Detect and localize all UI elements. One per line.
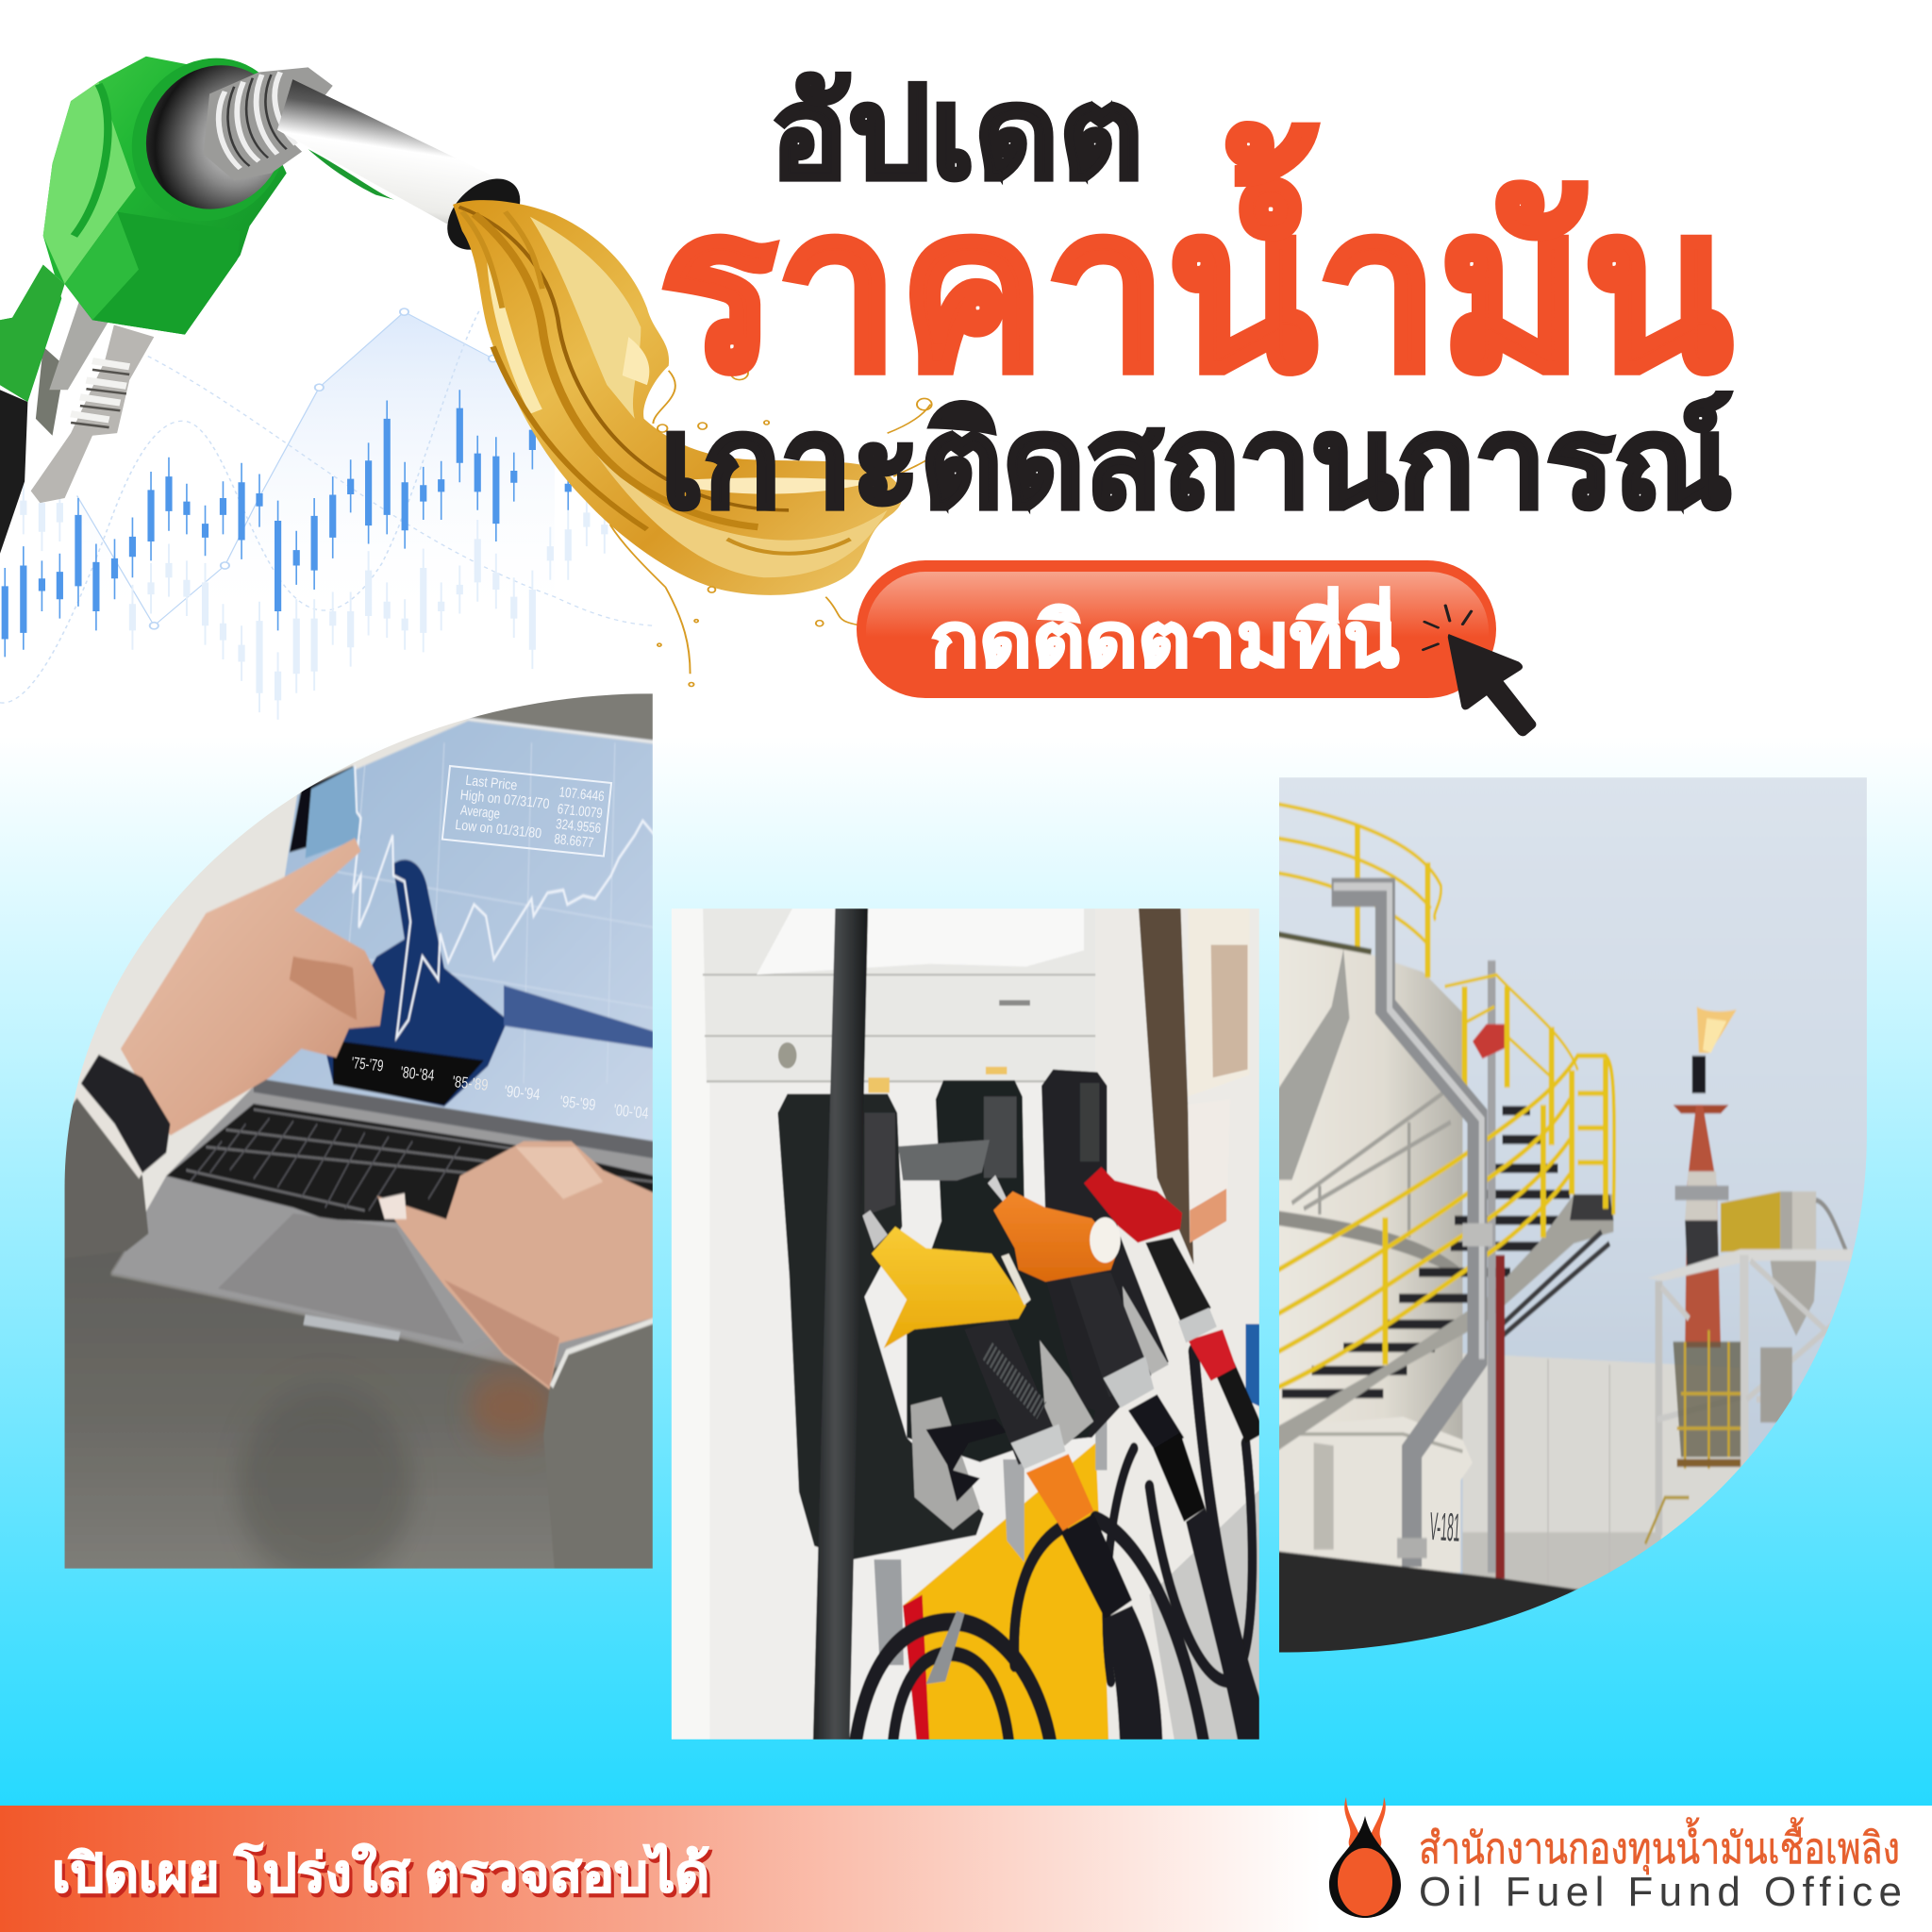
top desk strip — [470, 693, 653, 741]
trigger guard and lever — [31, 298, 154, 503]
on-screen price legend — [442, 766, 611, 857]
yellow panel — [903, 1443, 1109, 1752]
steel nozzle bodies — [910, 1397, 980, 1530]
white warehouse — [1462, 1353, 1740, 1540]
holster middle — [907, 1080, 1095, 1462]
holster left — [778, 1094, 984, 1559]
red vertical pipe — [1495, 1255, 1505, 1578]
main vertical hose — [812, 896, 868, 1762]
title line 1: อัปเดต — [770, 62, 1143, 205]
pump upper housing — [704, 909, 710, 1080]
title line 3: เกาะติดสถานการณ์ — [660, 391, 1732, 534]
process structure — [1645, 1191, 1852, 1543]
footer tagline: เปิดเผย โปร่งใส ตรวจสอบได้ — [55, 1846, 712, 1907]
on-screen price legend: Average — [459, 802, 501, 823]
footer tagline front: เปิดเผย โปร่งใส ตรวจสอบได้ — [52, 1842, 709, 1903]
storage tank — [1264, 935, 1462, 1445]
right hand — [376, 1141, 655, 1390]
reflection on screen — [325, 859, 508, 1107]
background candlestick chart — [0, 308, 653, 720]
price line — [353, 766, 655, 1038]
orange nozzle and hose — [1072, 1274, 1152, 1376]
cursor icon — [1424, 606, 1536, 736]
chart period labels: '80-'84 — [400, 1063, 435, 1085]
photo: laptop with stock chart — [55, 679, 662, 1586]
button label: กดติดตามที่นี่ — [930, 587, 1399, 682]
on-screen price legend: Last Price — [465, 773, 518, 794]
tank top railing — [1264, 802, 1441, 978]
black trigger — [926, 1419, 1007, 1502]
logo: oil drop with flames — [1329, 1797, 1401, 1918]
black hose — [0, 390, 27, 554]
blurred table — [64, 1250, 558, 1569]
title line 2: ราคาน้ำมัน — [659, 125, 1732, 416]
left hand — [121, 838, 385, 1136]
oil stream — [453, 200, 942, 687]
steel stair treads — [1282, 1110, 1570, 1393]
smart watch strap — [81, 1055, 170, 1173]
tank pipework — [1332, 892, 1477, 1567]
on-screen price legend: 671.0079 — [557, 801, 603, 822]
holster right — [1041, 1070, 1169, 1438]
dark ground — [1264, 1550, 1582, 1665]
chart period labels — [351, 1054, 649, 1123]
flare stack — [1674, 1007, 1737, 1347]
coiled hoses — [853, 1351, 1261, 1762]
hook — [926, 1611, 964, 1684]
green body — [0, 57, 287, 402]
threaded joint — [204, 67, 333, 180]
on-screen price legend: 88.6677 — [554, 831, 594, 851]
logo English name: Oil Fuel Fund Office — [1419, 1869, 1902, 1915]
footer band — [0, 1806, 1932, 1932]
chart period labels: '85-'89 — [452, 1073, 489, 1094]
stair stringer — [1264, 1194, 1613, 1460]
chart period labels: '95-'99 — [559, 1092, 596, 1114]
text: V-181 — [1429, 1504, 1461, 1550]
laptop keyboard deck — [110, 1087, 655, 1367]
chart period labels: '75-'79 — [351, 1054, 384, 1075]
red nozzle and hose — [1145, 1238, 1211, 1329]
chart period labels: '00-'04 — [613, 1101, 649, 1123]
spout opening — [432, 169, 535, 259]
steel spout — [277, 79, 502, 224]
on-screen price legend: Low on 01/31/80 — [455, 817, 542, 841]
right sleeve — [543, 1321, 655, 1580]
on-screen price legend: High on 07/31/70 — [459, 787, 550, 812]
nozzle trays — [898, 1140, 990, 1180]
fuel nozzle — [0, 50, 535, 554]
on-screen price legend: 324.9556 — [555, 816, 602, 837]
blurred background — [1199, 1508, 1202, 1510]
photo: oil refinery — [1264, 764, 1884, 1665]
on-screen price legend: 107.6446 — [558, 784, 605, 805]
laptop screen — [254, 721, 655, 1141]
yellow nozzle and hose — [964, 1319, 1061, 1465]
left sleeve — [64, 1097, 149, 1252]
photo: fuel pump nozzles — [660, 896, 1269, 1762]
yellow railings — [1264, 974, 1614, 1393]
silver collar — [135, 58, 297, 216]
follow button — [857, 560, 1496, 698]
chart period labels: '90-'94 — [504, 1082, 541, 1104]
